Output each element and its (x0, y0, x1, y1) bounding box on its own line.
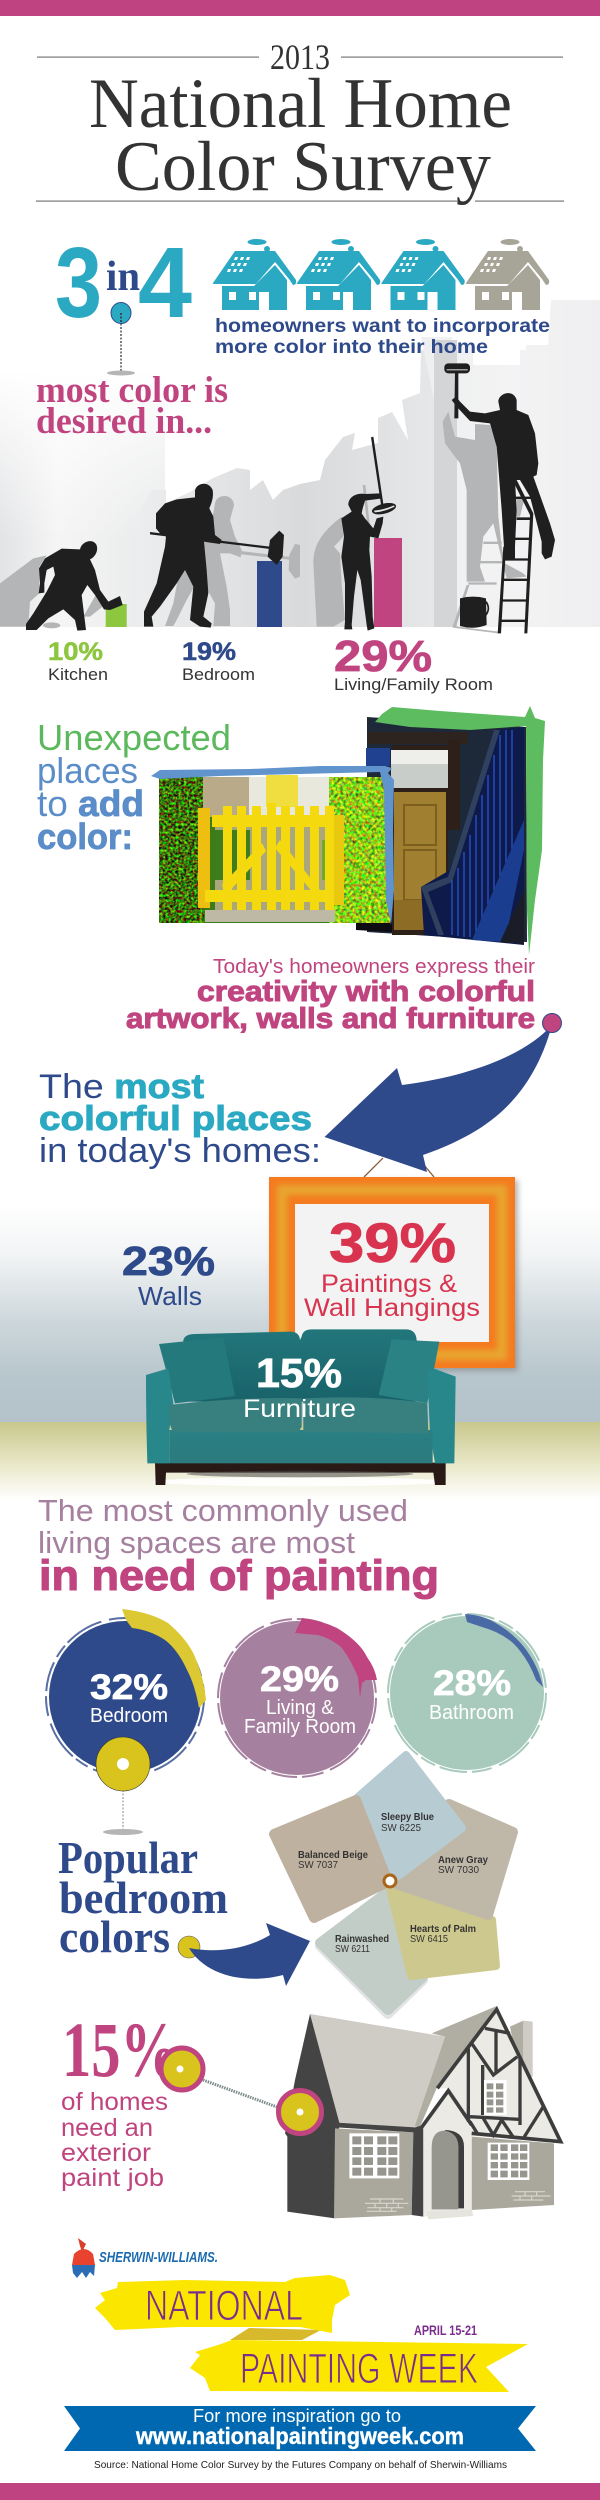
stat: kitchen (48, 638, 108, 684)
donut: bathroom 28% (388, 1614, 546, 1772)
text: creativity with colorful artwork: Today's homeowners express their (213, 956, 535, 978)
source: Source: National Home Color Survey by the Futures Company on behalf of Sherwin-Williams (94, 2459, 507, 2471)
heading: in need of painting: The most commonly used (38, 1493, 408, 1528)
heading: unexpected places: color: (37, 816, 133, 857)
text: creativity with colorful artwork: creativity with colorful (197, 976, 535, 1008)
donut: living and family room 29% (218, 1618, 377, 1777)
homeowners text: homeowners want to incorporate (215, 315, 550, 337)
donut: bathroom 28%: 28% (433, 1664, 511, 1703)
swatch: sleepy blue (358, 1755, 462, 1882)
bar chart: colour by room (106, 538, 402, 627)
heading: most color is desired in: most color is (36, 370, 228, 411)
photo: yellow garden gate (159, 775, 390, 923)
brush stroke: green (375, 706, 545, 955)
heading: most colorful places: colorful places (39, 1100, 312, 1138)
banner: website (64, 2406, 536, 2451)
picture frame: Wall Hangings (304, 1294, 480, 1322)
text: creativity with colorful artwork: artwork, walls and furniture (126, 1003, 535, 1035)
bricks (365, 2192, 551, 2211)
picture frame: Paintings & (321, 1270, 457, 1298)
picture frame: 39% (329, 1211, 456, 1274)
swatch: hearts of palm: Hearts of Palm (410, 1923, 476, 1935)
worker: bedroom sledgehammer (144, 484, 284, 628)
national painting week badge (95, 2275, 528, 2393)
swatch: balanced beige: Balanced Beige (298, 1849, 368, 1861)
heading: most color is desired in: desired in... (36, 401, 212, 442)
stat: 15 percent of homes: paint job (61, 2164, 164, 2192)
national painting week badge: NATIONAL (145, 2282, 303, 2330)
bottom bar (0, 2483, 600, 2500)
house illustration (285, 2006, 561, 2219)
heading: popular bedroom colors: colors (59, 1911, 170, 1962)
stat: living/family room (334, 632, 493, 694)
heading: popular bedroom colors: Popular (58, 1832, 198, 1883)
swatch: rainwashed: Rainwashed (335, 1933, 389, 1945)
donut: living and family room 29%: 29% (260, 1660, 339, 1699)
swatch: anew gray (390, 1804, 513, 1915)
donut: bathroom 28%: Bathroom (429, 1702, 514, 1724)
sofa (146, 1329, 456, 1486)
swatch pivot (382, 1874, 398, 1888)
picture frame (269, 1177, 518, 1371)
swatch: hearts of palm: SW 6415 (410, 1933, 448, 1945)
wall backdrop (0, 300, 600, 627)
big curved arrow (324, 1014, 562, 1172)
stat: 15 percent of homes: 15% (62, 2006, 179, 2093)
worker: living room roller (341, 437, 397, 631)
national painting week badge: PAINTING WEEK (240, 2345, 478, 2393)
heading: unexpected places: Unexpected (37, 717, 231, 758)
stat: kitchen: 10% (48, 638, 103, 666)
icon: paint can (72, 2238, 95, 2278)
heading: unexpected places: to add (37, 783, 144, 824)
logo: sherwin-williams (72, 2238, 218, 2278)
arrow origin dot (542, 1014, 562, 1032)
swatch: balanced beige (274, 1800, 388, 1918)
stat: bedroom: 19% (182, 638, 236, 666)
donut: bedroom 32%: Bedroom (90, 1705, 168, 1727)
icons: four houses (213, 239, 549, 310)
heading: unexpected places (37, 717, 231, 857)
yellow pin (96, 1737, 150, 1835)
heading: most color is desired in (36, 370, 228, 442)
stat: living/family room: 29% (334, 632, 432, 681)
homeowners text: more color into their home (215, 336, 488, 358)
text: creativity with colorful artwork (126, 956, 535, 1035)
title (36, 37, 564, 206)
arrow to colour swatches (178, 1923, 310, 1986)
swatch: rainwashed (320, 1890, 423, 2014)
sofa: 15% (256, 1350, 342, 1396)
heading: most colorful places (39, 1068, 321, 1170)
3 in 4 statistic: in (106, 254, 140, 300)
stat: 15 percent of homes: of homes (61, 2088, 168, 2116)
photo: blue staircase and door (356, 717, 527, 945)
stat: 15 percent of homes: need an (61, 2114, 153, 2142)
room wall background (0, 1205, 600, 1500)
worker: ladder and roller (444, 363, 555, 633)
3 in 4 statistic: 4 (138, 227, 192, 339)
stat: 15 percent of homes (61, 2006, 179, 2192)
swatch: rainwashed: SW 6211 (335, 1943, 370, 1955)
stat: 15 percent of homes: exterior (61, 2139, 151, 2167)
pin: 15 percent (161, 2048, 203, 2090)
pin (107, 302, 135, 376)
title: 2013 (270, 37, 330, 77)
worker: kitchen scraper (26, 541, 123, 631)
donut: bedroom 32%: 32% (90, 1668, 168, 1707)
brush stroke: blue (151, 766, 394, 925)
logo: sherwin-williams: SHERWIN-WILLIAMS. (99, 2249, 218, 2266)
donut: bedroom 32% (46, 1609, 206, 1776)
title: National Home (89, 65, 512, 143)
homeowners text (215, 315, 550, 358)
heading: in need of painting: in need of painting (39, 1552, 439, 1600)
stat: living/family room: Living/Family Room (334, 675, 493, 694)
entry door (427, 2130, 473, 2219)
heading: in need of painting (38, 1493, 439, 1600)
stat: bedroom: Bedroom (182, 665, 255, 684)
dotted connector (203, 2080, 277, 2107)
heading: unexpected places: places (37, 750, 138, 791)
top bar (0, 0, 600, 16)
donut: living and family room 29%: Living & (266, 1697, 335, 1719)
heading: popular bedroom colors (58, 1832, 228, 1962)
heading: most colorful places: The most (39, 1068, 204, 1106)
heading: in need of painting: living spaces are most (38, 1525, 355, 1560)
stat: walls: Walls (138, 1281, 202, 1311)
heading: most colorful places: in today's homes: (39, 1132, 321, 1170)
pin: on house (278, 2090, 322, 2134)
swatch: anew gray: SW 7030 (438, 1864, 479, 1876)
sofa: Furniture (243, 1395, 356, 1423)
3 in 4 statistic (55, 227, 192, 376)
swatch: hearts of palm (390, 1888, 496, 1976)
worker silhouettes (26, 363, 555, 633)
stat: kitchen: Kitchen (48, 665, 108, 684)
swatch: sleepy blue: SW 6225 (381, 1822, 421, 1834)
stat: bedroom (182, 638, 255, 684)
windows (349, 2080, 529, 2180)
national painting week badge: APRIL 15-21 (414, 2323, 477, 2338)
stat: walls: 23% (122, 1238, 215, 1284)
banner: website: www.nationalpaintingweek.com (135, 2423, 464, 2449)
stat: walls (122, 1238, 215, 1311)
swatch: sleepy blue: Sleepy Blue (381, 1811, 434, 1823)
swatch: anew gray: Anew Gray (438, 1854, 488, 1866)
3 in 4 statistic: 3 (55, 227, 102, 339)
worker shadows (0, 412, 527, 633)
heading: popular bedroom colors: bedroom (59, 1872, 228, 1923)
banner: website: For more inspiration go to (193, 2406, 401, 2426)
swatch: balanced beige: SW 7037 (298, 1859, 338, 1871)
donut: living and family room 29%: Family Room (244, 1716, 356, 1738)
title: Color Survey (115, 128, 491, 206)
colour swatch fan (274, 1755, 513, 2014)
picture wire (364, 1158, 434, 1177)
